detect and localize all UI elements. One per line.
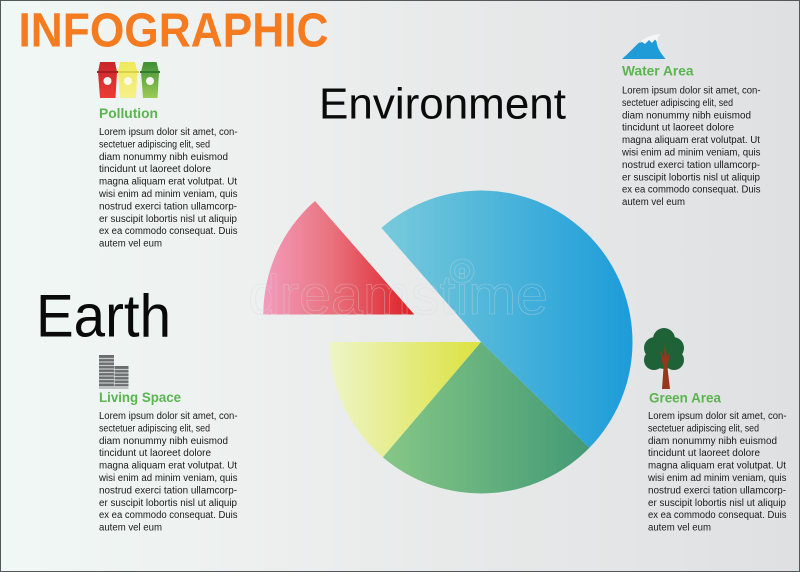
body: Water Area: sectetuer adipiscing elit, sed [622, 98, 733, 109]
watermark: dreamstime [248, 263, 548, 326]
slice: water area (blue) [381, 191, 632, 448]
body: Green Area: Lorem ipsum dolor sit amet, con- [648, 411, 786, 422]
body: Water Area: autem vel eum [622, 197, 685, 208]
body: Living Space: tincidunt ut laoreet dolore [99, 448, 212, 459]
body: Pollution: autem vel eum [99, 239, 162, 250]
heading: Water Area: Water Area [622, 62, 694, 78]
body: Water Area [621, 86, 761, 208]
body: Water Area: wisi enim ad minim veniam, quis [621, 148, 761, 158]
pie chart [263, 191, 632, 493]
body: Green Area: autem vel eum [648, 523, 711, 534]
body: Green Area: tincidunt ut laoreet dolore [648, 448, 761, 459]
icon: tree [644, 328, 684, 389]
body: Water Area: ex ea commodo consequat. Duis [622, 185, 761, 196]
body: Pollution: tincidunt ut laoreet dolore [99, 164, 212, 175]
body: Green Area: wisi enim ad minim veniam, quis [647, 473, 787, 484]
body: Pollution: ex ea commodo consequat. Duis [99, 226, 238, 237]
body: Pollution: wisi enim ad minim veniam, quis [98, 189, 238, 200]
text block: Living Space [98, 389, 238, 534]
heading: Earth: Earth [36, 282, 171, 350]
icon: recycling bins [97, 62, 160, 98]
heading: Living Space: Living Space [99, 389, 181, 405]
icon: wave [622, 34, 666, 59]
body: Water Area: Lorem ipsum dolor sit amet, con- [622, 86, 760, 96]
body: Pollution: nostrud exerci tation ullamcorp- [99, 201, 237, 212]
body: Green Area: er suscipit lobortis nisl ut aliquip [648, 498, 787, 509]
body: Water Area: er suscipit lobortis nisl ut aliquip [622, 172, 761, 183]
body: Living Space: Lorem ipsum dolor sit amet, con- [99, 411, 238, 422]
body: Water Area: tincidunt ut laoreet dolore [622, 123, 735, 134]
heading: Green Area: Green Area [649, 390, 721, 406]
body: Green Area [647, 411, 787, 534]
body: Green Area: sectetuer adipiscing elit, sed [648, 423, 759, 434]
body: Water Area: diam nonummy nibh euismod [622, 110, 751, 121]
icon: buildings [99, 355, 128, 389]
body: Living Space: sectetuer adipiscing elit, sed [99, 423, 210, 434]
body: Pollution: magna aliquam erat volutpat. Ut [99, 177, 237, 188]
body: Water Area: nostrud exerci tation ullamcorp- [622, 160, 760, 171]
body: Pollution: diam nonummy nibh euismod [99, 152, 228, 163]
body: Living Space: wisi enim ad minim veniam, quis [98, 473, 238, 484]
body: Living Space: magna aliquam erat volutpat. Ut [99, 461, 237, 472]
title: INFOGRAPHIC [18, 4, 328, 58]
slice: living space (yellow) [330, 342, 481, 457]
body: Pollution [98, 127, 238, 250]
body: Pollution: sectetuer adipiscing elit, sed [99, 139, 210, 150]
body: Green Area: nostrud exerci tation ullamcorp- [648, 485, 786, 496]
heading: Pollution: Pollution [99, 105, 158, 121]
text block: Pollution [98, 105, 238, 250]
body: Living Space: ex ea commodo consequat. Duis [99, 510, 238, 521]
body: Living Space: autem vel eum [99, 523, 162, 534]
text block: Green Area [647, 390, 787, 534]
body: Living Space: er suscipit lobortis nisl ut aliquip [99, 498, 238, 509]
body: Pollution: Lorem ipsum dolor sit amet, con- [99, 127, 238, 138]
slice: pollution (red, exploded) [263, 201, 414, 314]
body: Pollution: er suscipit lobortis nisl ut aliquip [99, 214, 238, 225]
body: Living Space: diam nonummy nibh euismod [99, 436, 228, 447]
text block: Water Area [621, 62, 761, 208]
body: Water Area: magna aliquam erat volutpat. Ut [622, 135, 760, 146]
body: Green Area: ex ea commodo consequat. Duis [648, 510, 787, 521]
slice: green area [383, 342, 589, 493]
body: Living Space [98, 411, 238, 534]
heading: Environment: Environment [319, 80, 566, 128]
body: Living Space: nostrud exerci tation ullamcorp- [99, 485, 237, 496]
body: Green Area: magna aliquam erat volutpat. Ut [648, 461, 786, 472]
body: Green Area: diam nonummy nibh euismod [648, 436, 777, 447]
